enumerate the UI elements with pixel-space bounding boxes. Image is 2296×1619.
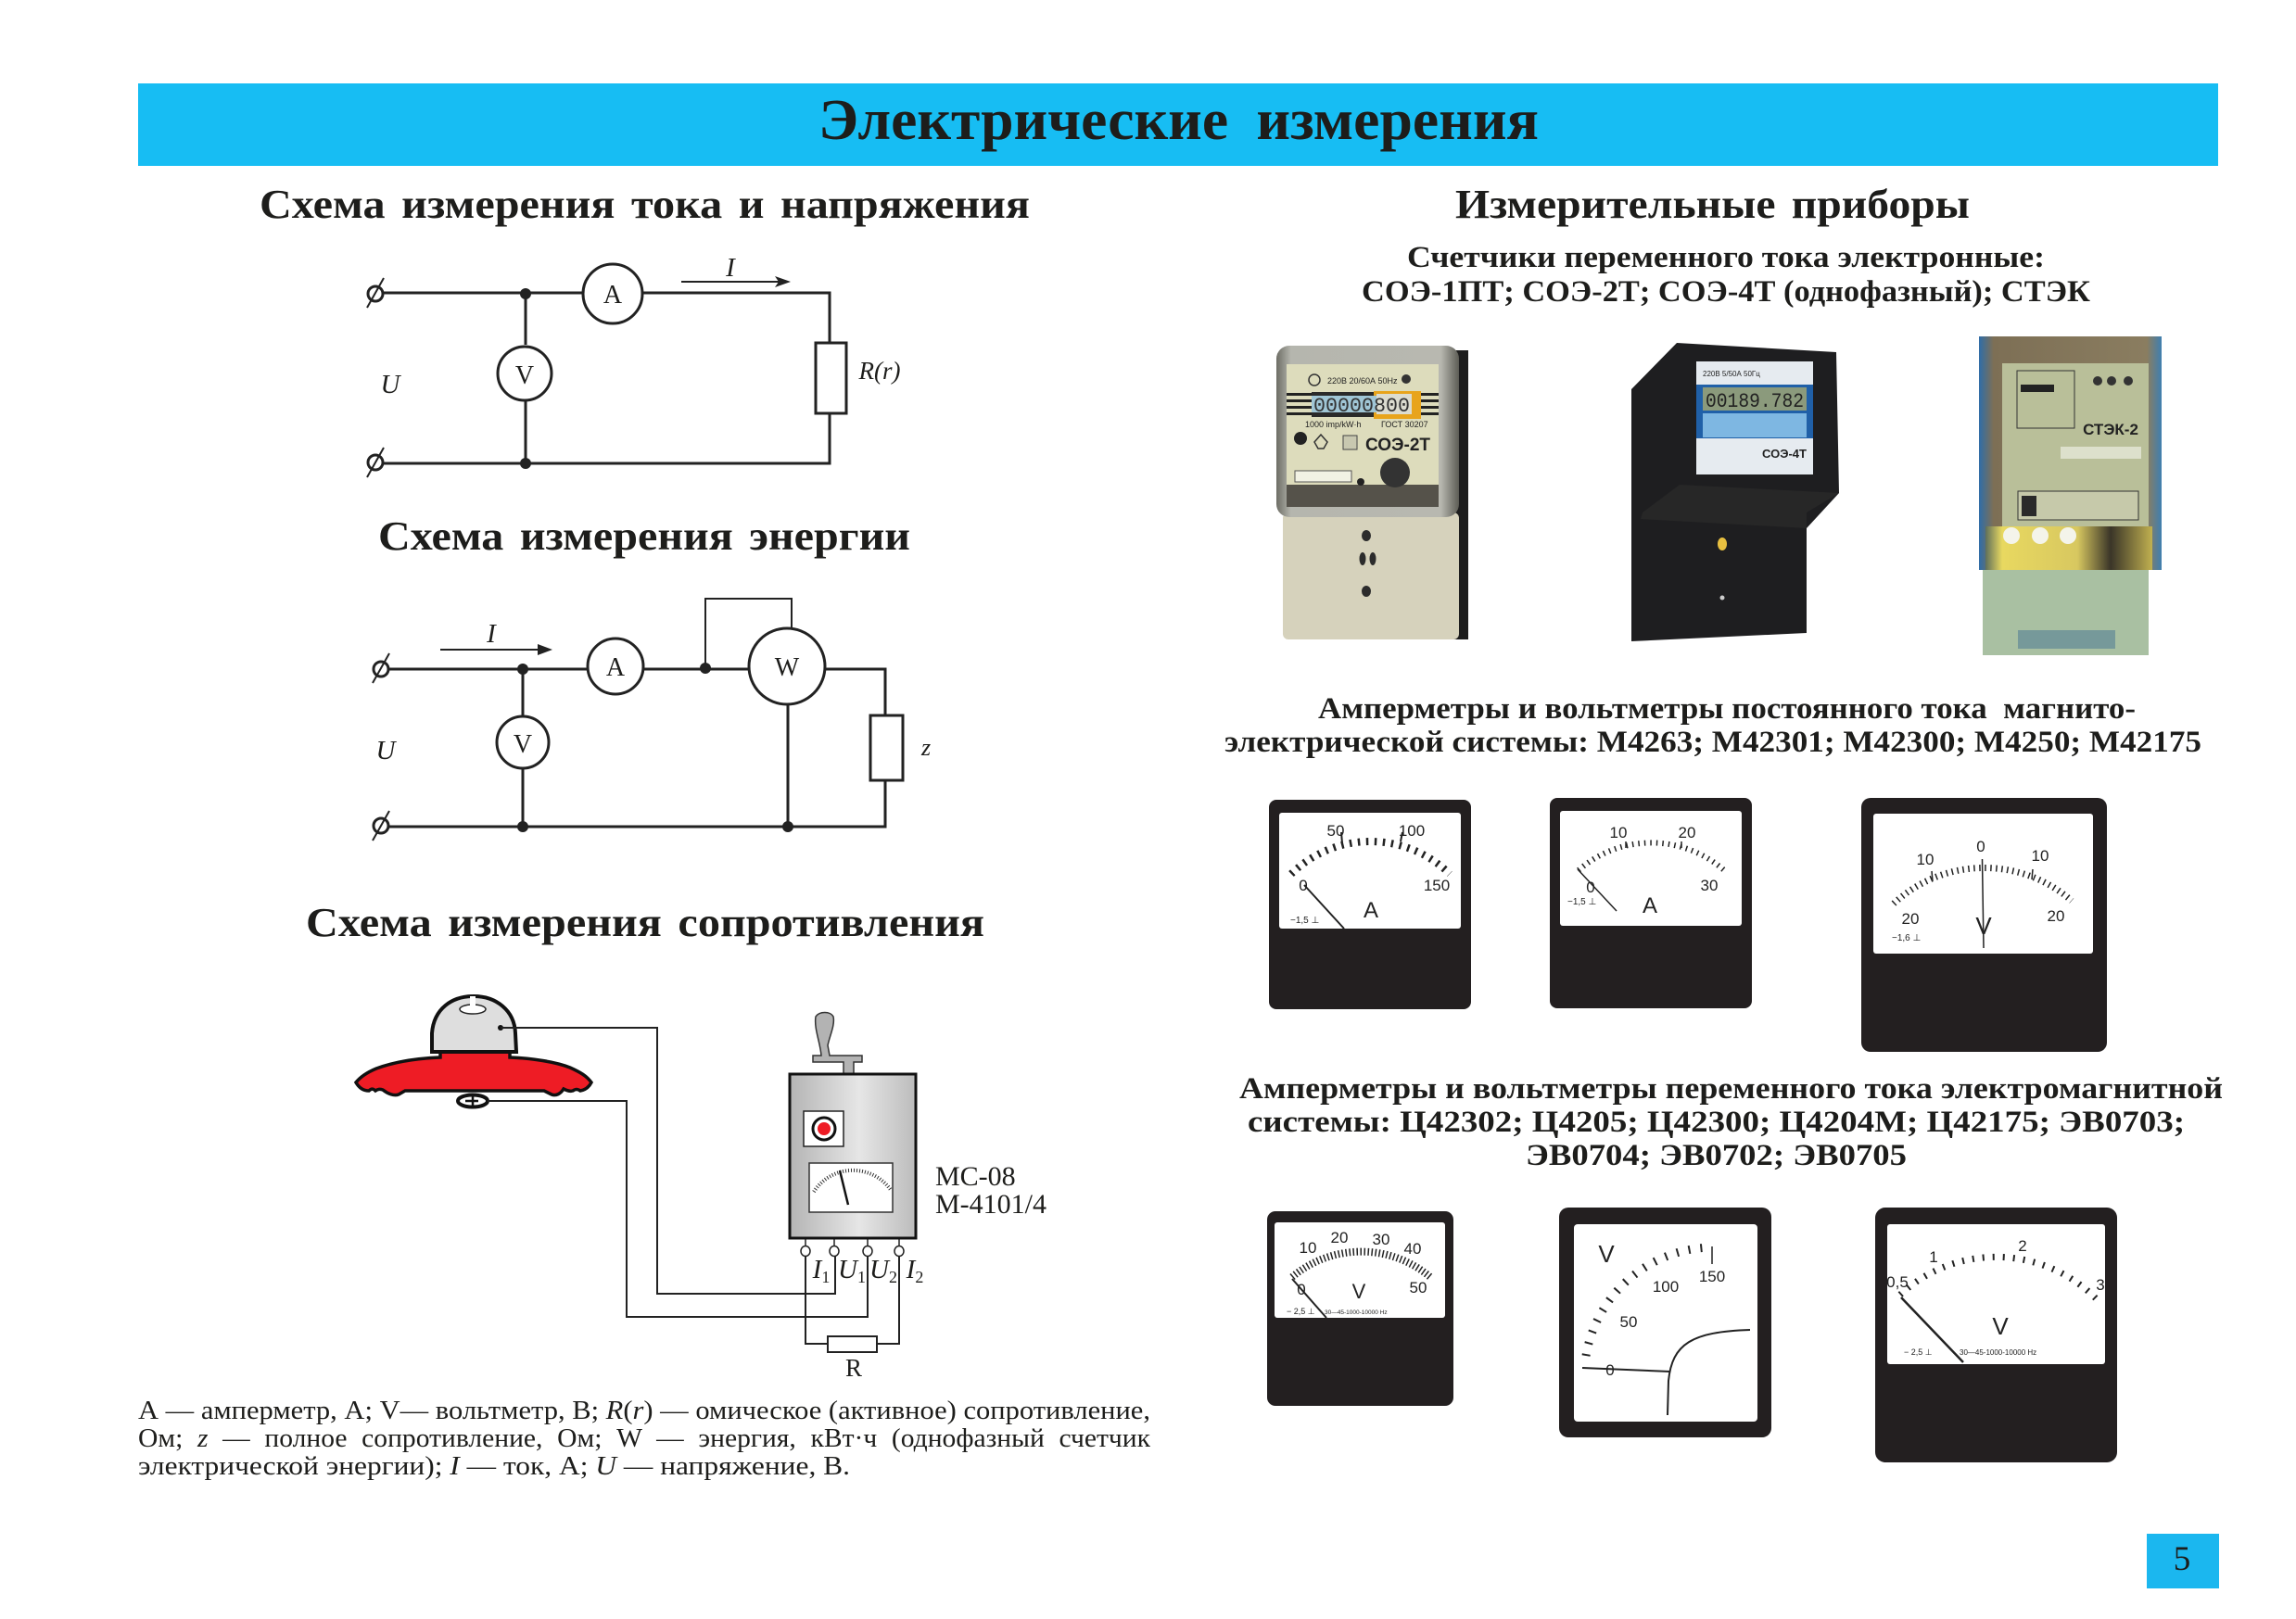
heading: current and voltage scheme: Схема измерения тока и напряжения <box>260 182 1030 227</box>
panel meter 4: voltmeter 0-50 <box>1267 1211 1453 1406</box>
subheading: AC ammeters and voltmeters: Амперметры и вольтметры переменного тока электромагнитной <box>1239 1072 2223 1106</box>
current arrow: I <box>486 619 497 649</box>
title banner <box>138 83 2218 166</box>
terminals <box>801 1246 904 1257</box>
panel meter 4: voltmeter 0-50: − 2,5 ⊥ <box>1287 1307 1315 1316</box>
voltmeter V: V <box>514 730 532 759</box>
panel meter 6: voltmeter 0.5-3: 3 <box>2096 1276 2105 1294</box>
panel meter 6: voltmeter 0.5-3: 0,5 <box>1886 1273 1909 1291</box>
panel meter 5: voltmeter 0-150: V <box>1598 1240 1615 1268</box>
photo: meter SOE-4T <box>1631 343 1839 641</box>
terminal labels: 1 <box>857 1268 866 1286</box>
device dial <box>809 1163 893 1212</box>
panel meter 2: ammeter 0-30: 30 <box>1701 877 1718 894</box>
panel meter 2: ammeter 0-30: A <box>1643 893 1657 918</box>
voltmeter V: V <box>515 361 534 390</box>
legend text <box>138 1397 1150 1481</box>
terminal labels <box>812 1255 923 1286</box>
panel meter 3: voltmeter 20-0-20 <box>1861 798 2107 1052</box>
title banner: Электрические измерения <box>818 89 1539 152</box>
resistor R: R <box>845 1354 862 1382</box>
ammeter A: A <box>606 653 626 682</box>
wattmeter W <box>749 628 825 704</box>
voltmeter V <box>497 716 549 768</box>
panel meter 4: voltmeter 0-50: 0 <box>1297 1281 1306 1298</box>
panel meter 5: voltmeter 0-150: 50 <box>1620 1313 1637 1331</box>
subheading: electronic AC meters <box>1362 241 2090 309</box>
panel meter 1: ammeter 0-150 <box>1269 800 1471 1009</box>
panel meter 4: voltmeter 0-50: 50 <box>1410 1279 1427 1296</box>
wattmeter W: W <box>775 653 800 682</box>
photo: meter SOE-4T: 220В 5/50А 50Гц <box>1703 370 1760 378</box>
panel meter 1: ammeter 0-150: 100 <box>1399 822 1425 840</box>
legend text: А — амперметр, А; V— вольтметр, В; R(r) — омическое (активное) сопротивление, <box>138 1397 1150 1425</box>
panel meter 3: voltmeter 20-0-20: 0 <box>1976 838 1985 855</box>
photo: meter STEK-2: СТЭК-2 <box>2083 421 2138 438</box>
terminal stubs <box>806 1238 899 1246</box>
panel meter 3: voltmeter 20-0-20: 10 <box>2032 847 2049 865</box>
panel meter 5: voltmeter 0-150: 150 <box>1699 1268 1725 1285</box>
subheading: AC ammeters and voltmeters: системы: Ц42302; Ц4205; Ц42300; Ц4204М; Ц42175; ЭВ0703; <box>1248 1106 2185 1139</box>
subheading: DC ammeters and voltmeters: электрической системы: М4263; М42301; М42300; М4250; М42175 <box>1224 726 2201 759</box>
circuit: current and voltage <box>367 253 900 477</box>
panel meter 2: ammeter 0-30: 20 <box>1679 824 1695 841</box>
panel meter 6: voltmeter 0.5-3 <box>1875 1208 2117 1462</box>
label z: z <box>920 734 931 761</box>
terminal labels: U <box>869 1255 889 1284</box>
panel meter 5: voltmeter 0-150: 0 <box>1605 1361 1615 1379</box>
photo: meter SOE-2T: СОЭ-2Т <box>1365 436 1430 455</box>
ammeter A: A <box>603 281 623 310</box>
ammeter A <box>583 264 642 323</box>
panel meter 5: voltmeter 0-150 <box>1559 1208 1771 1437</box>
label R(r): R(r) <box>858 357 900 385</box>
terminal labels: I <box>813 1255 821 1284</box>
terminal labels: 2 <box>889 1268 897 1286</box>
terminal labels: U <box>838 1255 857 1284</box>
photo: meter STEK-2 <box>1979 336 2162 655</box>
photo: meter SOE-2T: 1000 imp/kW·h <box>1305 420 1362 429</box>
connecting wires <box>488 1028 899 1344</box>
ammeter A <box>588 639 643 694</box>
photo: meter SOE-2T: 220В 20/60А 50Hz <box>1327 376 1398 386</box>
panel meter 6: voltmeter 0.5-3: − 2,5 ⊥ <box>1904 1347 1933 1357</box>
subheading: DC ammeters and voltmeters: Амперметры и вольтметры постоянного тока магнито- <box>1318 692 2136 726</box>
panel meter 4: voltmeter 0-50: V <box>1352 1280 1366 1303</box>
resistor R <box>828 1336 877 1382</box>
panel meter 3: voltmeter 20-0-20: 20 <box>1902 910 1919 928</box>
device model label: М-4101/4 <box>935 1189 1047 1220</box>
panel meter 4: voltmeter 0-50: 40 <box>1404 1240 1421 1258</box>
panel meter 3: voltmeter 20-0-20: 10 <box>1917 851 1934 868</box>
terminal labels: 2 <box>915 1268 923 1286</box>
photo: meter SOE-2T: 00000800 <box>1313 395 1410 418</box>
panel meter 2: ammeter 0-30: 0 <box>1586 879 1595 896</box>
photo: meter SOE-4T: 00189.782 <box>1706 390 1804 413</box>
panel meter 2: ammeter 0-30: 10 <box>1610 824 1627 841</box>
current arrow <box>440 619 552 655</box>
legend text: Ом; z — полное сопротивление, Ом; W — энергия, кВт·ч (однофазный счетчик <box>138 1424 1150 1453</box>
subheading: AC ammeters and voltmeters: ЭВ0704; ЭВ0702; ЭВ0705 <box>1526 1139 1907 1172</box>
panel meter 1: ammeter 0-150: −1,5 ⊥ <box>1290 916 1319 926</box>
panel meter 5: voltmeter 0-150: 100 <box>1653 1278 1679 1296</box>
panel meter 3: voltmeter 20-0-20: −1,6 ⊥ <box>1892 933 1921 943</box>
subheading: AC ammeters and voltmeters <box>1239 1072 2223 1172</box>
current arrow <box>681 253 791 287</box>
terminal labels: 1 <box>821 1268 830 1286</box>
heading: energy scheme: Схема измерения энергии <box>378 513 910 559</box>
panel meter 4: voltmeter 0-50: 10 <box>1300 1239 1316 1257</box>
label U: U <box>376 736 398 765</box>
panel meter 2: ammeter 0-30: −1,5 ⊥ <box>1567 897 1596 907</box>
panel meter 4: voltmeter 0-50: 30—45-1000-10000 Hz <box>1325 1309 1388 1316</box>
panel meter 3: voltmeter 20-0-20: V <box>1975 912 1992 940</box>
panel meter 3: voltmeter 20-0-20: 20 <box>2048 907 2064 925</box>
panel meter 6: voltmeter 0.5-3: V <box>1992 1312 2009 1340</box>
subheading: electronic AC meters: СОЭ-1ПТ; СОЭ-2Т; СОЭ-4Т (однофазный); СТЭК <box>1362 275 2090 309</box>
indicator lamp <box>804 1111 844 1146</box>
page number <box>2147 1534 2219 1588</box>
panel meter 6: voltmeter 0.5-3: 1 <box>1929 1248 1938 1266</box>
label U: U <box>381 370 402 399</box>
panel meter 4: voltmeter 0-50: 30 <box>1373 1231 1389 1248</box>
panel meter 6: voltmeter 0.5-3: 30—45-1000-10000 Hz <box>1960 1348 2036 1357</box>
photo: meter SOE-4T: СОЭ-4Т <box>1762 447 1807 461</box>
megohmmeter device <box>790 1012 916 1238</box>
photo: meter SOE-2T: ГОСТ 30207 <box>1381 420 1428 429</box>
panel meter 4: voltmeter 0-50: 20 <box>1331 1229 1348 1246</box>
panel meter 1: ammeter 0-150: 150 <box>1424 877 1450 894</box>
subheading: DC ammeters and voltmeters <box>1224 692 2201 759</box>
page number: 5 <box>2174 1540 2190 1578</box>
photo: meter SOE-2T <box>1276 346 1468 639</box>
heading: measuring instruments: Измерительные приборы <box>1455 182 1970 227</box>
insulator <box>356 996 591 1107</box>
panel meter 2: ammeter 0-30 <box>1550 798 1752 1008</box>
panel meter 1: ammeter 0-150: 50 <box>1327 822 1344 840</box>
panel meter 1: ammeter 0-150: 0 <box>1299 877 1308 894</box>
device model label: МС-08 <box>935 1161 1016 1192</box>
panel meter 1: ammeter 0-150: A <box>1364 898 1378 923</box>
subheading: electronic AC meters: Счетчики переменного тока электронные: <box>1407 241 2045 274</box>
legend text: электрической энергии); I — ток, А; U — напряжение, В. <box>138 1452 850 1481</box>
current arrow: I <box>725 253 736 283</box>
voltmeter V <box>498 347 552 400</box>
panel meter 6: voltmeter 0.5-3: 2 <box>2018 1237 2027 1255</box>
resistance scheme <box>356 996 1047 1382</box>
terminal labels: I <box>907 1255 915 1284</box>
heading: resistance scheme: Схема измерения сопротивления <box>306 900 984 945</box>
circuit: energy <box>373 599 931 841</box>
